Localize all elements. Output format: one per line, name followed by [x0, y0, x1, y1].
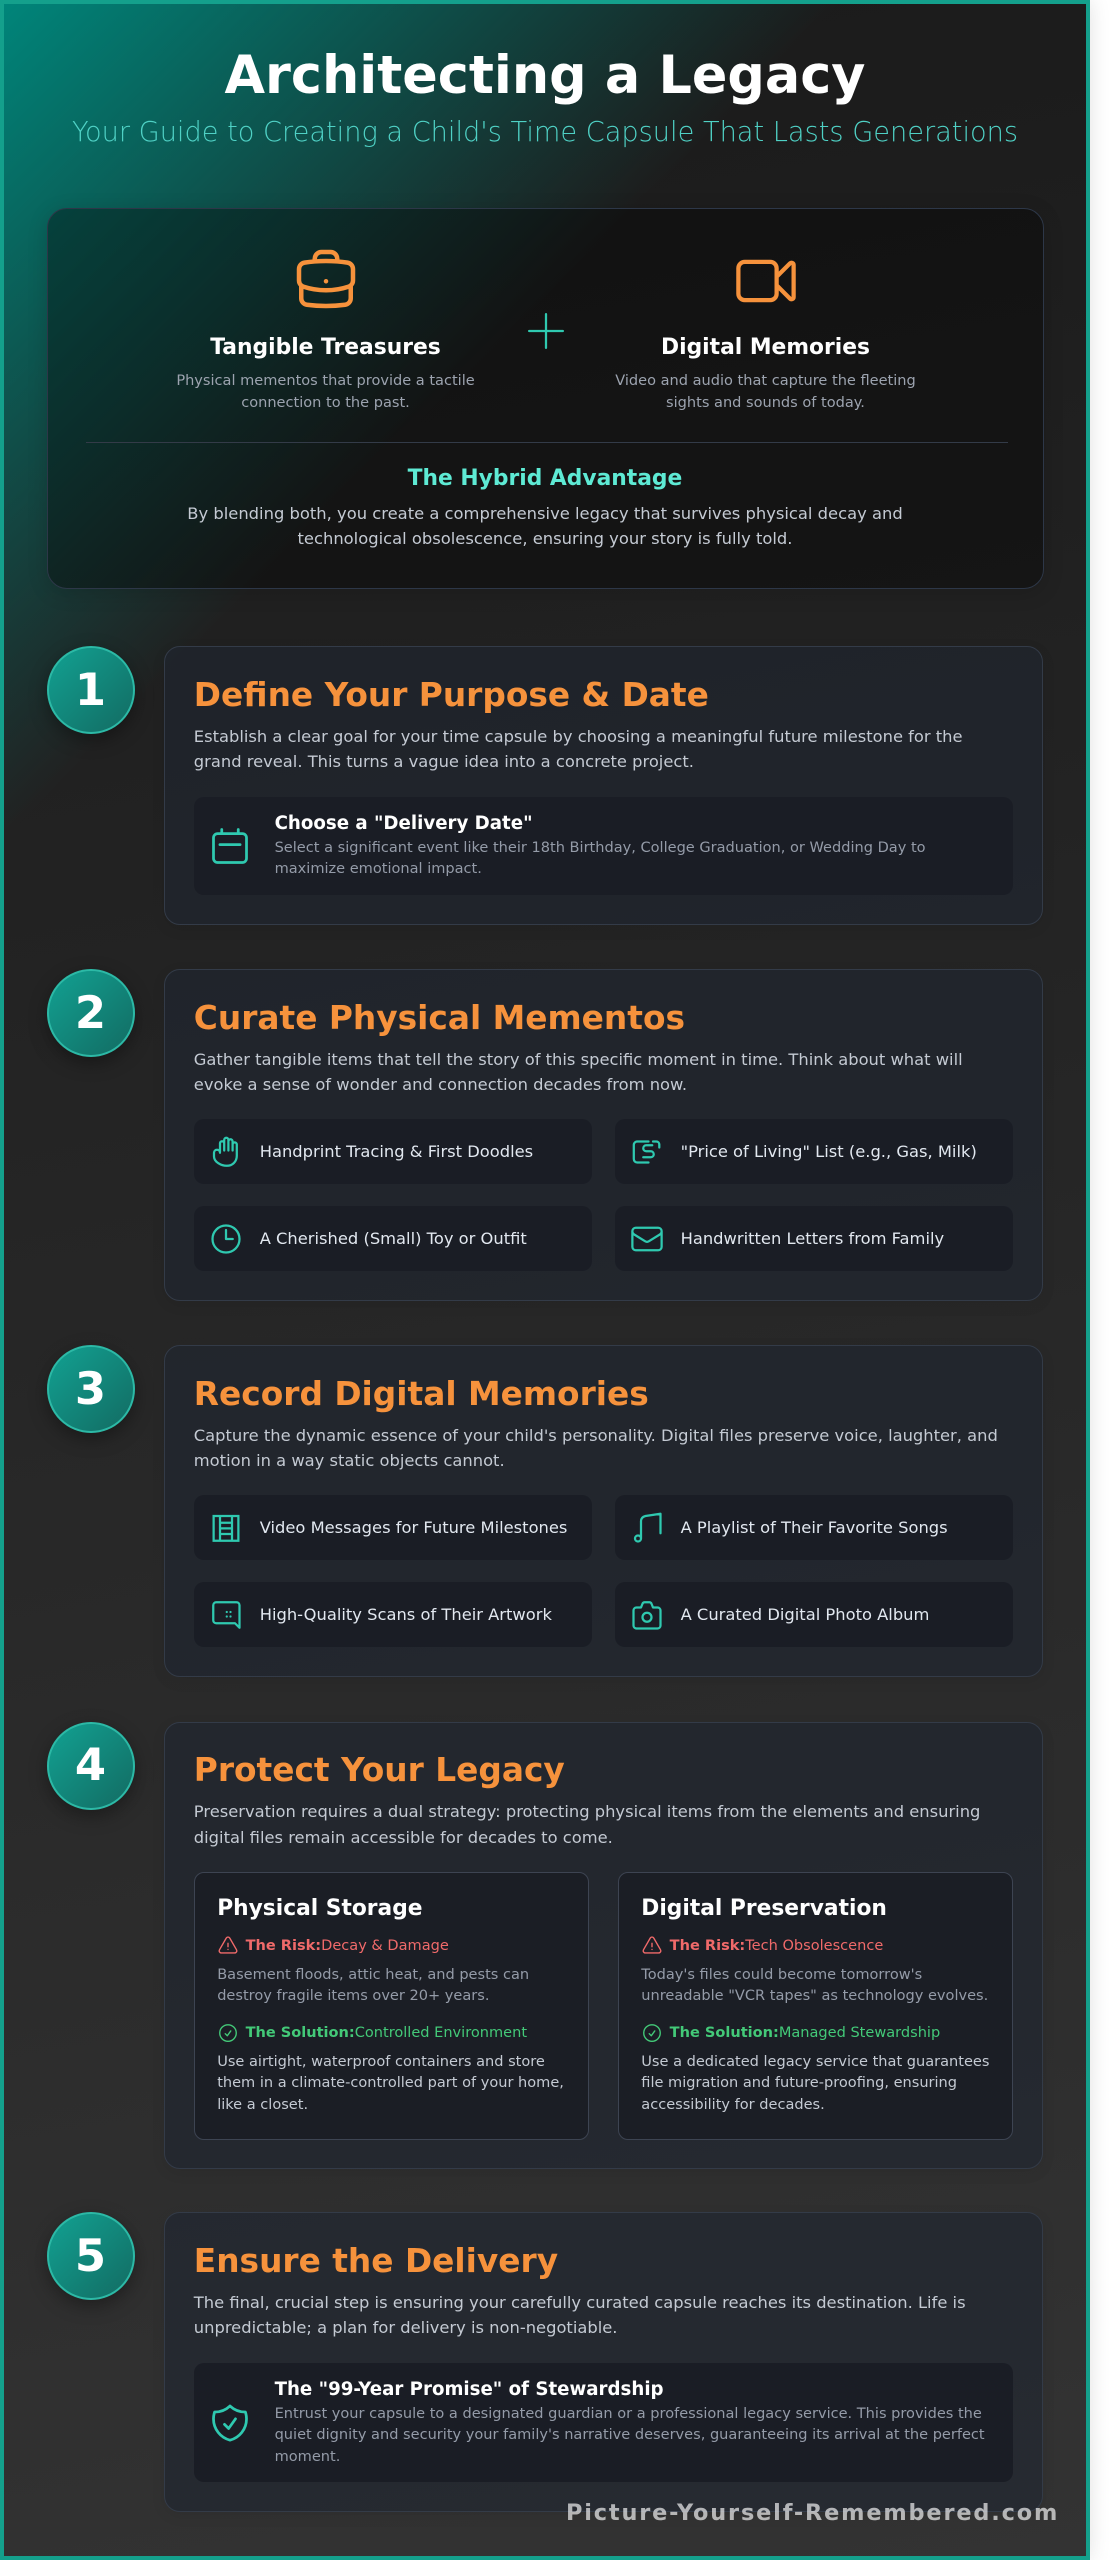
risk description: Today's files could become tomorrow's: [641, 1966, 922, 1983]
comparison: storage strategies: [194, 1872, 1013, 2140]
item: video messages: [194, 1495, 592, 1560]
text: step 1: Establish a clear goal for your time capsule by choosing a meaningful future milestone for the: [194, 727, 963, 746]
text: tangible description: Physical mementos that provide a tactile: [176, 372, 475, 388]
icon: warning: [642, 1936, 662, 1954]
panel: step 3: [164, 1345, 1043, 1677]
heading: physical storage: Physical Storage: [217, 1896, 423, 1921]
risk description: unreadable "VCR tapes" as technology evolves.: [641, 1987, 988, 2004]
panel: step 1: [164, 646, 1043, 925]
solution label: The Solution:Managed Stewardship: [670, 2024, 940, 2041]
text: step 2: evoke a sense of wonder and connection decades from now.: [194, 1075, 687, 1094]
text: step 5: [194, 2293, 966, 2337]
item: handprint: Handprint Tracing & First Doodles: [260, 1142, 533, 1161]
item grid: digital memories: [194, 1495, 1013, 1647]
text: step 3: motion in a way static objects cannot.: [194, 1451, 505, 1470]
callout text: Select a significant event like their 18th Birthday, College Graduation, or Wedding Day to: [275, 839, 926, 856]
solution description: Use a dedicated legacy service that guarantees: [641, 2053, 989, 2070]
solution description: file migration and future-proofing, ensuring: [641, 2074, 957, 2091]
icon: briefcase: [296, 250, 356, 308]
step number 4: 4: [75, 1738, 106, 1791]
heading: digital memories: Digital Memories: [661, 334, 870, 360]
column: digital memories: [615, 260, 916, 410]
callout text: [274, 2379, 985, 2465]
callout text: Choose a "Delivery Date": [275, 813, 533, 834]
step number 5: [46, 2212, 134, 2300]
callout text: quiet dignity and security your family's narrative deserves, guaranteeing its arrival at the perfect: [275, 2426, 985, 2443]
column: tangible treasures: [176, 250, 475, 410]
icon: warning: [218, 1936, 238, 1954]
item grid: physical mementos: [195, 1120, 1013, 1271]
solution description: accessibility for decades.: [641, 2096, 825, 2113]
text: step 5: unpredictable; a plan for delivery is non-negotiable.: [194, 2318, 617, 2337]
subtitle: Your Guide to Creating a Child's Time Capsule That Lasts Generations: [72, 117, 1018, 148]
item: handprint: [194, 1119, 592, 1184]
heading: step 1: Define Your Purpose & Date: [194, 676, 709, 714]
callout text: The "99-Year Promise" of Stewardship: [275, 2379, 664, 2400]
item: photo album: A Curated Digital Photo Album: [681, 1605, 929, 1624]
text: step 3: Capture the dynamic essence of your child's personality. Digital files preserve voice, laughter, and: [194, 1426, 998, 1445]
panel: step 5: [164, 2212, 1043, 2512]
item: price list: "Price of Living" List (e.g., Gas, Milk): [681, 1142, 977, 1161]
solution description: [641, 2053, 989, 2113]
icon: hand: [212, 1136, 238, 1167]
step number 1: [46, 646, 134, 734]
item: toy: A Cherished (Small) Toy or Outfit: [260, 1229, 527, 1248]
item: price list: [615, 1119, 1013, 1184]
item: playlist: [615, 1495, 1013, 1560]
heading: tangible treasures: Tangible Treasures: [210, 334, 441, 360]
panel: hybrid intro: [46, 208, 1044, 588]
icon: calendar: [212, 828, 248, 864]
solution label: The Solution:Controlled Environment: [246, 2024, 527, 2041]
text: step 1: [194, 727, 963, 771]
panel: step 2: [164, 969, 1043, 1301]
panel: physical storage: [194, 1872, 589, 2140]
item: scans: [194, 1582, 592, 1647]
item: scans: High-Quality Scans of Their Artwork: [260, 1605, 552, 1624]
heading: hybrid advantage: The Hybrid Advantage: [408, 466, 682, 490]
text: digital description: sights and sounds of today.: [666, 394, 865, 410]
text: hybrid description: By blending both, you create a comprehensive legacy that survives physical decay and: [187, 504, 903, 522]
divider: [86, 442, 1008, 443]
step number 1: 1: [75, 663, 106, 716]
icon: film: [212, 1514, 240, 1542]
text: step 3: [194, 1426, 998, 1470]
icon: shield check: [212, 2404, 248, 2442]
heading: digital preservation: Digital Preservation: [641, 1896, 887, 1921]
risk label: The Risk:Tech Obsolescence: [670, 1937, 883, 1954]
text: tangible description: [176, 372, 475, 410]
text: digital description: Video and audio that capture the fleeting: [615, 372, 916, 388]
step number 2: [46, 969, 134, 1057]
icon: artwork scan: [212, 1601, 241, 1629]
icon: camera: [632, 1601, 662, 1630]
step number 3: [46, 1345, 134, 1433]
solution description: like a closet.: [217, 2096, 308, 2113]
title: Architecting a Legacy: [225, 45, 865, 106]
risk label: The Risk:Decay & Damage: [246, 1937, 449, 1954]
heading: step 5: Ensure the Delivery: [194, 2242, 558, 2280]
item: toy: [194, 1206, 592, 1271]
icon: music note: [634, 1512, 662, 1543]
item: video messages: Video Messages for Future Milestones: [260, 1518, 567, 1537]
panel: step 4: [164, 1722, 1043, 2169]
text: hybrid description: [187, 504, 903, 548]
callout text: [275, 813, 926, 877]
heading: step 4: Protect Your Legacy: [194, 1751, 565, 1789]
icon: envelope: [631, 1226, 663, 1252]
icon: price list: [632, 1140, 660, 1164]
step number 2: 2: [75, 986, 106, 1039]
icon: check circle: [219, 2024, 237, 2042]
text: step 5: The final, crucial step is ensuring your carefully curated capsule reaches its destination. Life is: [194, 2293, 966, 2312]
heading: step 3: Record Digital Memories: [194, 1375, 649, 1413]
item: letters: [615, 1206, 1013, 1271]
solution description: Use airtight, waterproof containers and store: [217, 2053, 545, 2070]
text: step 2: [194, 1050, 963, 1094]
step number 4: [46, 1722, 134, 1810]
text: tangible description: connection to the past.: [241, 394, 410, 410]
icon: video camera: [736, 260, 796, 302]
icon: check circle: [643, 2024, 661, 2042]
solution description: [217, 2053, 564, 2113]
heading: step 2: Curate Physical Mementos: [194, 999, 685, 1037]
callout: delivery date: [194, 797, 1013, 895]
callout: 99-year promise: [194, 2363, 1013, 2482]
text: digital description: [615, 372, 916, 410]
item: photo album: [615, 1582, 1013, 1647]
risk description: [641, 1966, 988, 2004]
risk description: [217, 1966, 529, 2004]
text: step 4: digital files remain accessible for decades to come.: [194, 1828, 613, 1847]
text: step 4: Preservation requires a dual strategy: protecting physical items from the elements and ensuring: [194, 1802, 980, 1821]
watermark: Picture-Yourself-Remembered.com: [566, 2500, 1059, 2526]
callout text: moment.: [275, 2448, 340, 2465]
step number 3: 3: [75, 1362, 106, 1415]
panel: digital preservation: [618, 1872, 1013, 2140]
icon: clock: [211, 1224, 241, 1254]
callout text: maximize emotional impact.: [275, 860, 482, 877]
risk description: destroy fragile items over 20+ years.: [217, 1987, 489, 2004]
callout text: Entrust your capsule to a designated guardian or a professional legacy service. This provides the: [275, 2405, 982, 2422]
item: playlist: A Playlist of Their Favorite Songs: [681, 1518, 948, 1537]
step number 5: 5: [75, 2229, 106, 2282]
risk description: Basement floods, attic heat, and pests can: [217, 1966, 529, 1983]
solution description: them in a climate-controlled part of your home,: [217, 2074, 564, 2091]
text: hybrid description: technological obsolescence, ensuring your story is fully told.: [298, 529, 792, 548]
text: step 2: Gather tangible items that tell the story of this specific moment in time. Think about what will: [194, 1050, 963, 1069]
icon: plus: [528, 313, 564, 349]
text: step 4: [194, 1802, 980, 1847]
text: step 1: grand reveal. This turns a vague idea into a concrete project.: [194, 752, 694, 771]
item: letters: Handwritten Letters from Family: [681, 1229, 944, 1248]
